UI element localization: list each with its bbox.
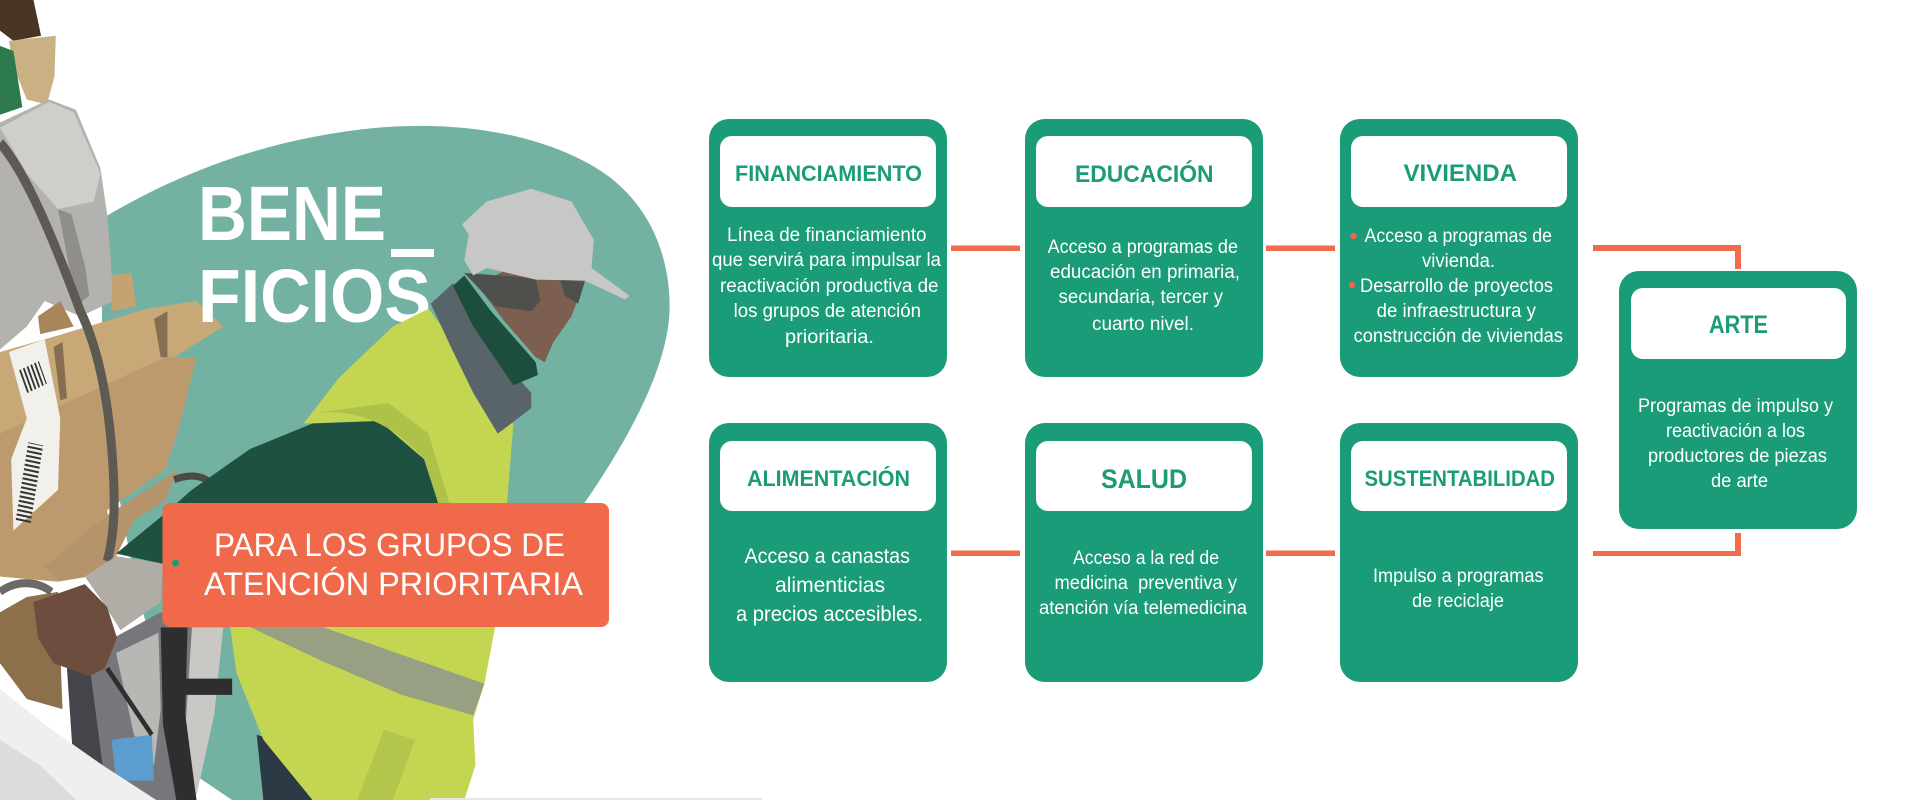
text: financiamiento: prioritaria. (785, 327, 874, 348)
callout: target group (162, 503, 609, 627)
text: financiamiento: que servirá para impulsar la (712, 250, 941, 271)
text: educación: educación en primaria, (1050, 262, 1240, 283)
text: salud: atención vía telemedicina (1039, 598, 1247, 619)
text: arte: de arte (1711, 471, 1768, 492)
panel: sustentabilidad (1340, 423, 1578, 682)
text: financiamiento (712, 225, 941, 348)
photo: lower cart (0, 612, 232, 800)
arrow: top row to Arte (1593, 245, 1741, 269)
text: financiamiento: Línea de financiamiento (727, 225, 926, 246)
text: educación (1048, 237, 1240, 335)
connectors: top row (951, 246, 1335, 251)
text: vivienda: de infraestructura y (1377, 301, 1536, 322)
text: alimentación: a precios accesibles. (736, 603, 923, 626)
text: arte: productores de piezas (1648, 446, 1827, 467)
title: FICIOS (198, 254, 431, 338)
text: arte (1638, 396, 1833, 492)
text: vivienda (1354, 226, 1563, 347)
text: educación: cuarto nivel. (1092, 314, 1194, 335)
text: educación: secundaria, tercer y (1058, 287, 1223, 308)
text: arte: reactivación a los (1666, 421, 1805, 442)
heading: sustentabilidad: SUSTENTABILIDAD (1364, 466, 1555, 491)
title: BENE (198, 171, 386, 257)
text: vivienda: construcción de viviendas (1354, 326, 1563, 347)
callout: target group: PARA LOS GRUPOS DE (214, 527, 565, 563)
heading: vivienda: VIVIENDA (1404, 160, 1517, 187)
heading: alimentación: ALIMENTACIÓN (747, 466, 910, 491)
title (198, 171, 434, 338)
text: salud: medicina preventiva y (1054, 573, 1237, 594)
text: vivienda: Desarrollo de proyectos (1360, 276, 1553, 297)
panel: alimentación (709, 423, 947, 682)
arrow: bottom row to Arte (1593, 533, 1741, 556)
panel: salud (1025, 423, 1263, 682)
panel: arte (1619, 271, 1857, 529)
text: financiamiento: reactivación productiva de (720, 276, 938, 297)
connectors: bottom row (951, 550, 1335, 556)
text: vivienda: vivienda. (1422, 251, 1495, 272)
background blob (102, 126, 670, 800)
panel: educación (1025, 119, 1263, 377)
photo: worker (33, 189, 629, 800)
heading: arte: ARTE (1709, 311, 1768, 339)
bullet (1350, 233, 1357, 239)
heading: financiamiento: FINANCIAMIENTO (735, 161, 922, 186)
text: alimentación (736, 545, 923, 626)
heading: salud: SALUD (1101, 464, 1187, 494)
text: alimentación: Acceso a canastas (744, 545, 910, 568)
text: salud: Acceso a la red de (1073, 548, 1219, 569)
photo: recycled load on the cart (0, 0, 232, 800)
text: salud (1039, 548, 1247, 619)
panel: vivienda (1340, 119, 1578, 377)
text: alimentación: alimenticias (775, 574, 885, 597)
callout: target group: ATENCIÓN PRIORITARIA (204, 566, 584, 602)
text: arte: Programas de impulso y (1638, 396, 1833, 417)
text: financiamiento: los grupos de atención (734, 301, 921, 322)
photo: sleeve and hand (33, 556, 163, 676)
heading: educación: EDUCACIÓN (1075, 160, 1214, 188)
text: vivienda: Acceso a programas de (1364, 226, 1552, 247)
text: sustentabilidad: de reciclaje (1412, 591, 1504, 612)
text: educación: Acceso a programas de (1048, 237, 1238, 258)
text: sustentabilidad (1373, 566, 1544, 612)
text: sustentabilidad: Impulso a programas (1373, 566, 1544, 587)
bullet (1349, 282, 1355, 288)
panel: financiamiento (709, 119, 947, 377)
